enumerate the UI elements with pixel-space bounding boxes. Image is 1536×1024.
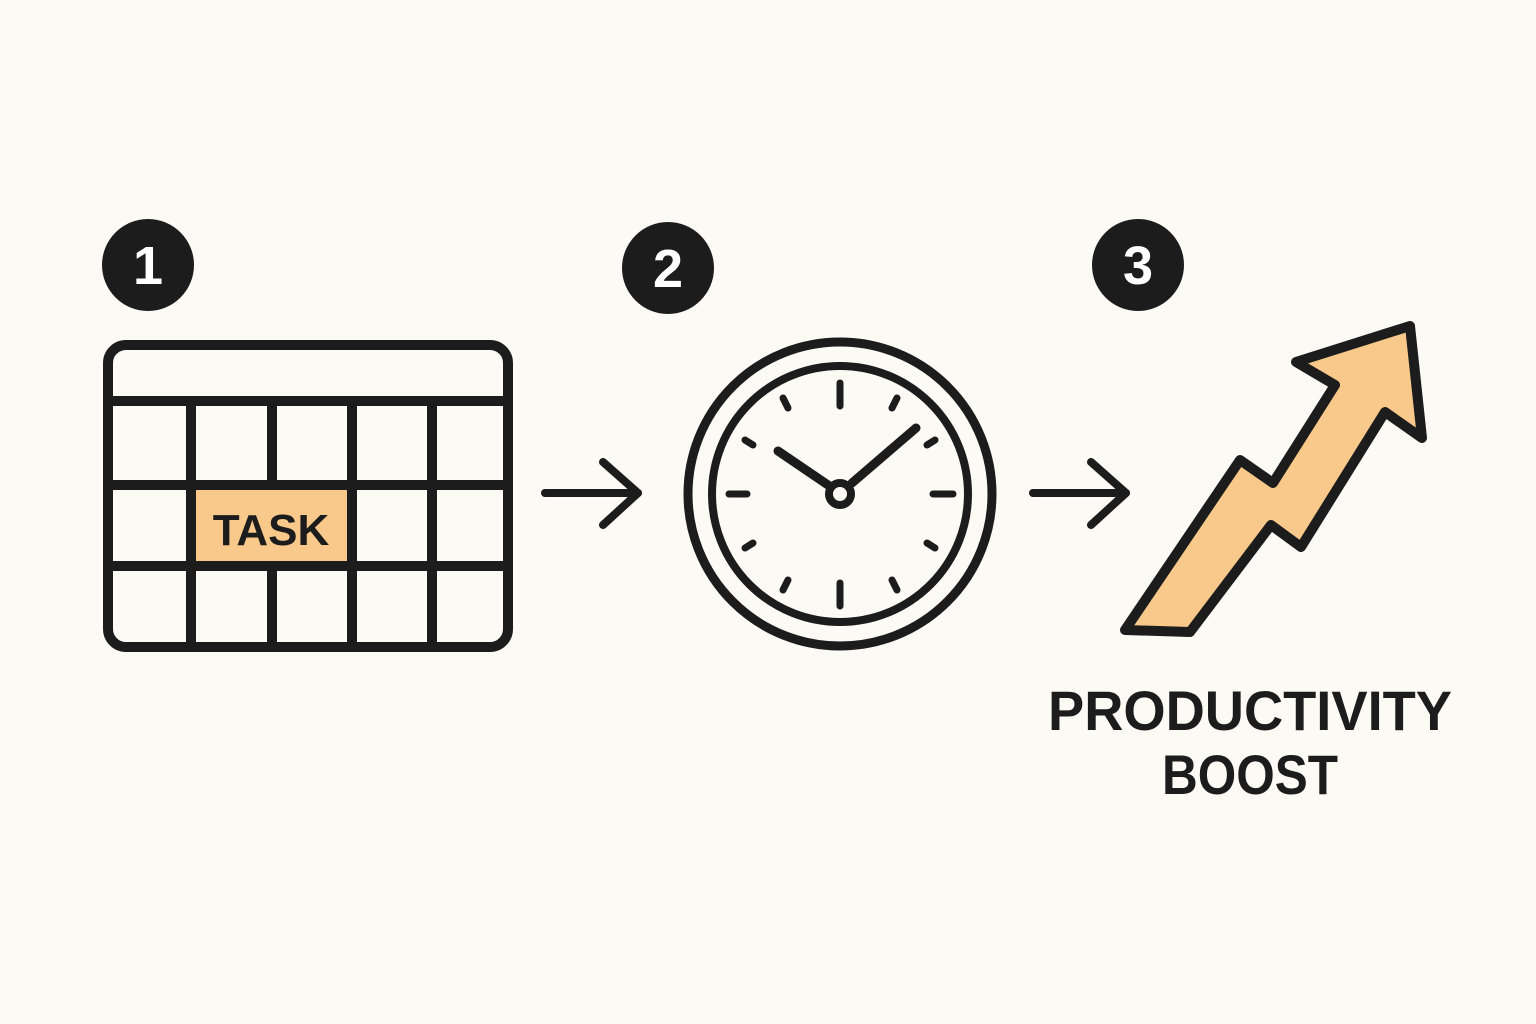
icon: growth arrow bbox=[1125, 326, 1422, 632]
text: TASK: TASK bbox=[213, 506, 329, 555]
badge: step 3 bbox=[1092, 219, 1184, 311]
text: productivity boost bbox=[1048, 679, 1452, 806]
badge: step 3: 3 bbox=[1123, 236, 1153, 296]
arrow: step 1 to 2 bbox=[545, 462, 638, 525]
text: productivity boost: BOOST bbox=[1162, 743, 1338, 806]
icon: calendar with task bbox=[108, 345, 508, 647]
badge: step 1 bbox=[102, 219, 194, 311]
badge: step 2 bbox=[622, 222, 714, 314]
badge: step 2: 2 bbox=[653, 239, 683, 299]
text: productivity boost: PRODUCTIVITY bbox=[1048, 679, 1452, 742]
icon: clock bbox=[688, 342, 992, 646]
badge: step 1: 1 bbox=[133, 236, 163, 296]
arrow: step 2 to 3 bbox=[1033, 462, 1126, 525]
